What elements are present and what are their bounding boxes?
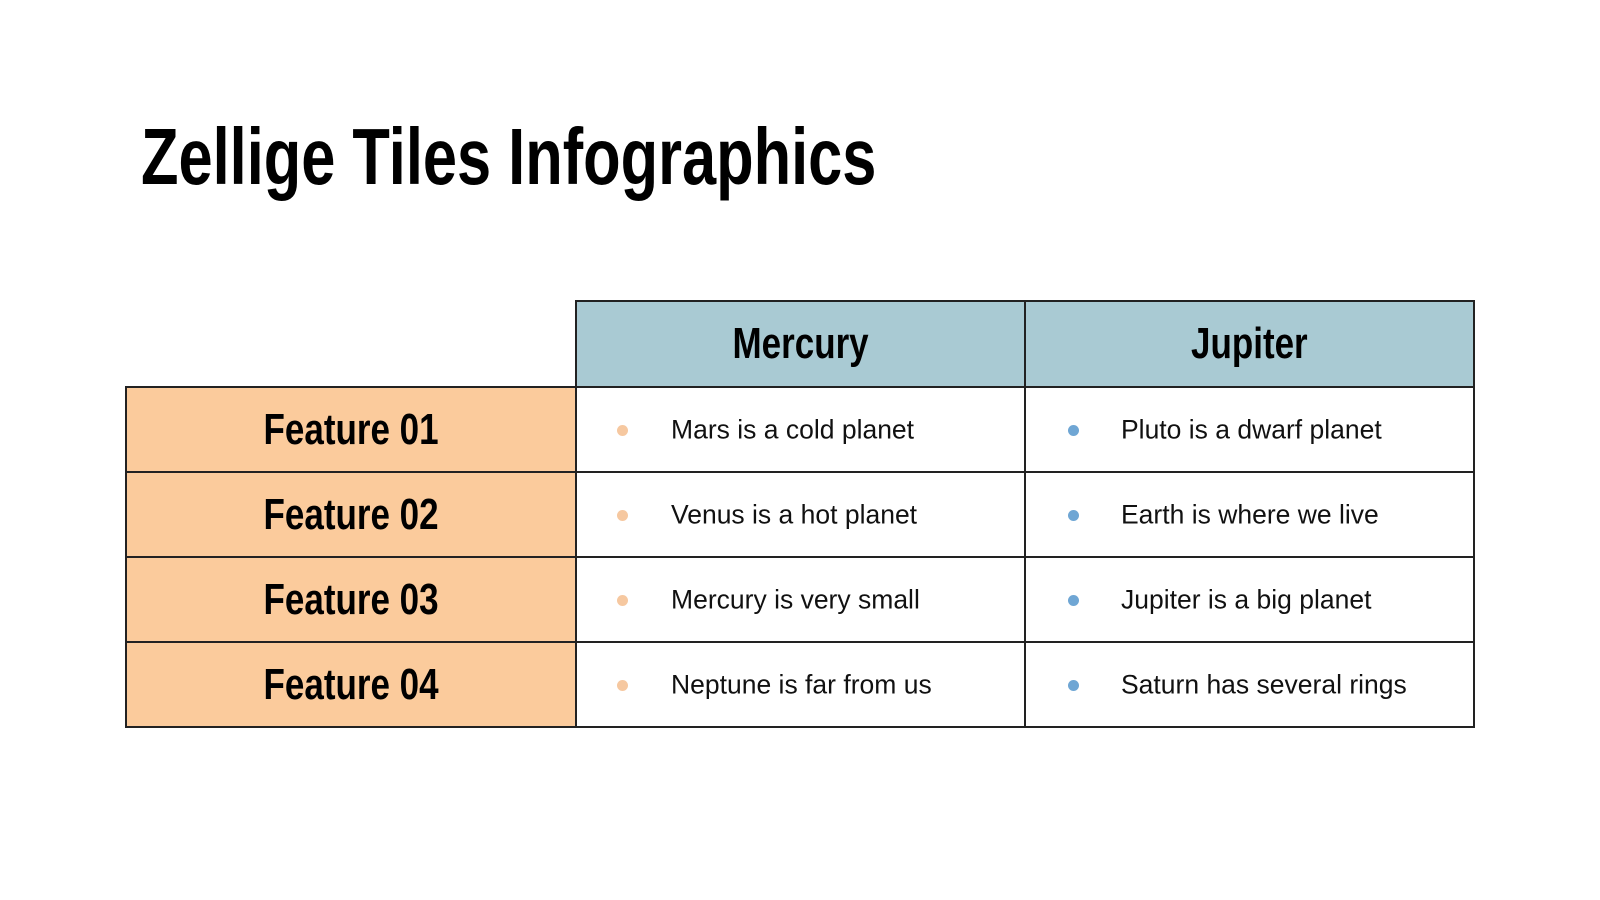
cell: Mercury row 4 [575, 641, 1026, 728]
cell: Jupiter row 2: Earth is where we live [1121, 499, 1379, 529]
row label: Feature 01 [125, 386, 577, 473]
row label: Feature 03: Feature 03 [263, 574, 438, 624]
row label: Feature 02 [125, 471, 577, 558]
cell: Mercury row 4: Neptune is far from us [671, 669, 932, 699]
cell: Mercury row 2: Venus is a hot planet [671, 499, 917, 529]
row label: Feature 04: Feature 04 [263, 660, 438, 708]
cell: Mercury row 3: Mercury is very small [671, 584, 920, 614]
cell: Jupiter row 2 [1024, 471, 1475, 558]
cell: Jupiter row 4: Saturn has several rings [1121, 669, 1407, 699]
header: Mercury: Mercury [732, 319, 869, 368]
cell: Jupiter row 4 [1024, 641, 1475, 728]
cell: Jupiter row 3 [1024, 556, 1475, 643]
cell: Mercury row 1 [575, 386, 1026, 473]
header: Mercury [575, 300, 1026, 388]
row label: Feature 01: Feature 01 [263, 404, 438, 454]
cell: Mercury row 2 [575, 471, 1026, 558]
row label: Feature 02: Feature 02 [263, 490, 438, 538]
cell: Jupiter row 1 [1024, 386, 1475, 473]
cell: Jupiter row 3: Jupiter is a big planet [1121, 584, 1371, 614]
cell: Mercury row 1: Mars is a cold planet [671, 414, 914, 444]
row label: Feature 03 [125, 556, 577, 643]
row label: Feature 04 [125, 641, 577, 728]
header: Jupiter: Jupiter [1191, 319, 1308, 368]
header: Jupiter [1024, 300, 1475, 388]
cell: Jupiter row 1: Pluto is a dwarf planet [1121, 414, 1382, 444]
cell: Mercury row 3 [575, 556, 1026, 643]
title: Zellige Tiles Infographics [141, 112, 876, 201]
